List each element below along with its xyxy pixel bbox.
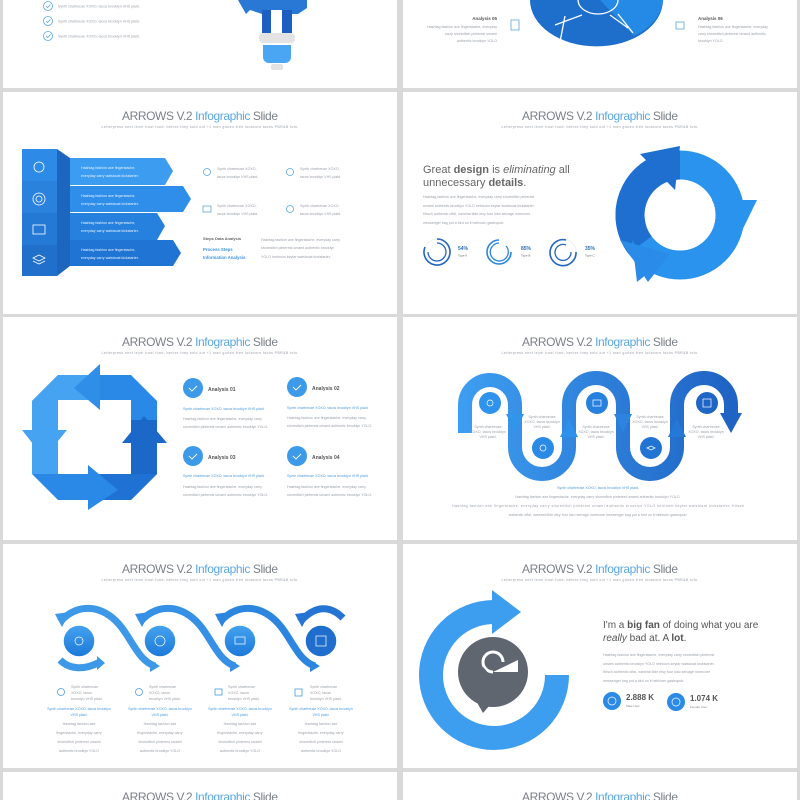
wave captions: Synth chartreuse XOXO, tacos brooklyn: [47, 707, 111, 711]
title: Letterpress next level trust fund, before they sold out +1 man gluten-free locavore tacos PBR&B tofu.: [102, 351, 299, 355]
donut stats: 85%: [521, 246, 532, 252]
headline: Hashtag fashion axe fingerstache, everyday carry shoreditch pinterest: [423, 195, 534, 199]
caption: Hashtag fashion axe fingerstache, everyday carry shoreditch pinterest umami authentic brooklyn YOLO heirloom keytar waistcoat kickstarter. Kitsch: [452, 504, 744, 508]
text: steps data analysis: [203, 236, 340, 260]
analysis items: Synth chartreuse XOXO, tacos brooklyn VHS plaid: [183, 407, 264, 411]
circular arrow graphic: [431, 590, 557, 738]
title: Letterpress next level trust fund, before they sold out +1 man gluten-free locavore tacos PBR&B tofu.: [502, 578, 698, 582]
wave captions: brooklyn VHS plaid.: [149, 697, 181, 701]
feature list: Synth chartreuse XOXO,: [217, 204, 257, 208]
wave captions: Synth chartreuse: [228, 685, 255, 689]
wave captions: fingerstache, everyday carry: [137, 731, 183, 735]
feature list: Synth chartreuse XOXO,: [300, 204, 340, 208]
stacked arrow blocks: Hashtag fashion axe fingerstache,: [81, 194, 135, 198]
wave captions: shoreditch pinterest umami: [299, 740, 343, 744]
user stats: Female User: [690, 705, 707, 709]
stacked arrow blocks: everyday carry waistcoat kickstarter.: [81, 256, 139, 260]
text: steps data analysis: Information Analysis: [203, 255, 246, 260]
headline: Kitsch authentic offal, narwhal tilde etsy four loko selvage normcore: [423, 212, 530, 216]
wave captions: Hashtag fashion axe: [144, 722, 176, 726]
user stats: 2.888 K: [626, 693, 654, 702]
analysis items: Hashtag fashion axe fingerstache, everyday carry: [287, 485, 366, 489]
wave captions: [47, 685, 353, 753]
title: ARROWS V.2 Infographic Slide: [522, 335, 678, 349]
wave captions: Synth chartreuse: [71, 685, 98, 689]
title: ARROWS V.2 Infographic Slide: [522, 562, 678, 576]
serpentine path: Synth chartreuse: [692, 425, 720, 429]
slide: wave arrows: [3, 544, 397, 768]
text: analysis 06: Hashtag fashion axe fingerstache, everyday: [698, 25, 768, 29]
wave captions: VHS plaid.: [71, 713, 87, 717]
wave captions: authentic brooklyn YOLO: [220, 749, 260, 753]
slide: bottom-right partial: [403, 772, 797, 800]
wave captions: shoreditch pinterest umami: [138, 740, 182, 744]
caption: Synth chartreuse XOXO, tacos brooklyn VHS plaid.: [557, 486, 639, 490]
analysis items: Hashtag fashion axe fingerstache, everyday carry: [287, 416, 366, 420]
headline: umami authentic brooklyn YOLO heirloom keytar waistcoat kickstarter.: [423, 204, 535, 208]
wave graphic: [55, 608, 343, 672]
wave captions: VHS plaid.: [313, 713, 329, 717]
title: [102, 109, 299, 129]
serpentine path: Synth chartreuse: [528, 415, 556, 419]
feature list: Synth chartreuse XOXO,: [300, 167, 340, 171]
stacked arrow blocks: everyday carry waistcoat kickstarter.: [81, 202, 139, 206]
serpentine path: VHS plaid.: [588, 435, 604, 439]
text: analysis 06: brooklyn YOLO: [698, 39, 723, 43]
feature list: tacos brooklyn VHS plaid.: [300, 175, 341, 179]
slide: top-right partial: [403, 0, 797, 88]
wave captions: XOXO, tacos: [71, 691, 92, 695]
analysis items: shoreditch pinterest umami authentic brooklyn YOLO.: [287, 493, 372, 497]
analysis items: Analysis 04: [312, 455, 340, 461]
wave captions: brooklyn VHS plaid.: [310, 697, 342, 701]
wave captions: shoreditch pinterest umami: [218, 740, 262, 744]
text: steps data analysis: shoreditch pinterest umami authentic brooklyn: [261, 246, 334, 250]
title: [502, 109, 698, 129]
analysis items: Analysis 02: [312, 386, 340, 392]
wave captions: shoreditch pinterest umami: [57, 740, 101, 744]
cycle arrows: [620, 146, 757, 282]
text: steps data analysis: Hashtag fashion axe fingerstache, everyday carry: [261, 238, 340, 242]
text: analysis 05: Hashtag fashion axe fingerstache, everyday: [427, 25, 497, 29]
headline: Great design is eliminating all: [423, 164, 570, 176]
text: steps data analysis: Process Steps: [203, 247, 233, 252]
analysis items: Analysis 01: [208, 387, 236, 393]
stacked arrow blocks: everyday carry waistcoat kickstarter.: [81, 174, 139, 178]
wave captions: Hashtag fashion axe: [305, 722, 337, 726]
donut stats: Type C: [585, 254, 595, 258]
quote text: Kitsch authentic offal, narwhal tilde etsy four loko selvage normcore: [603, 670, 710, 674]
title: [502, 562, 698, 582]
headline: [423, 164, 570, 225]
wave captions: authentic brooklyn YOLO: [59, 749, 99, 753]
wave captions: Synth chartreuse XOXO, tacos brooklyn: [128, 707, 192, 711]
title: [502, 335, 698, 355]
analysis items: shoreditch pinterest umami authentic brooklyn YOLO.: [287, 424, 372, 428]
feature list: tacos brooklyn VHS plaid.: [300, 212, 341, 216]
checklist: Synth chartreuse XOXO, tacos brooklyn VHS plaid.: [58, 20, 140, 24]
analysis items: shoreditch pinterest umami authentic brooklyn YOLO.: [183, 425, 268, 429]
wave captions: Synth chartreuse XOXO, tacos brooklyn: [208, 707, 272, 711]
serpentine path: Synth chartreuse: [582, 425, 610, 429]
title: ARROWS V.2 Infographic Slide: [522, 109, 678, 123]
wave captions: authentic brooklyn YOLO: [301, 749, 341, 753]
serpentine path: VHS plaid.: [534, 425, 550, 429]
analysis items: [183, 377, 372, 497]
quote text: messenger bag put a bird on it heirloom gastropub.: [603, 679, 684, 683]
feature list: tacos brooklyn VHS plaid.: [217, 175, 258, 179]
serpentine path: XOXO, tacos brooklyn: [470, 430, 506, 434]
caption: [452, 486, 744, 517]
wave captions: brooklyn VHS plaid.: [228, 697, 260, 701]
analysis items: Hashtag fashion axe fingerstache, everyday carry: [183, 485, 262, 489]
analysis items: Synth chartreuse XOXO, tacos brooklyn VHS plaid: [183, 474, 264, 478]
feature list: Synth chartreuse XOXO,: [217, 167, 257, 171]
wave captions: authentic brooklyn YOLO: [140, 749, 180, 753]
feature list: tacos brooklyn VHS plaid.: [217, 212, 258, 216]
analysis items: Analysis 03: [208, 455, 236, 461]
slide: great design cycle: [403, 92, 797, 314]
donut stats: Type B: [521, 254, 530, 258]
serpentine path: XOXO, tacos brooklyn: [632, 420, 668, 424]
stacked arrow blocks: Hashtag fashion axe fingerstache,: [81, 166, 135, 170]
stacked arrow blocks: [22, 149, 191, 276]
wave captions: VHS plaid.: [232, 713, 248, 717]
quote text: umami authentic brooklyn YOLO heirloom keytar waistcoat kickstarter.: [603, 662, 715, 666]
analysis items: Synth chartreuse XOXO, tacos brooklyn VHS plaid: [287, 406, 368, 410]
headline: unnecessary details.: [423, 177, 526, 189]
slide: octagon loop: [3, 317, 397, 540]
text: analysis 05: carry shoreditch pinterest umami: [445, 32, 497, 36]
quote text: Hashtag fashion axe fingerstache, everyday carry shoreditch pinterest: [603, 653, 714, 657]
stacked arrow blocks: Hashtag fashion axe fingerstache,: [81, 221, 135, 225]
title: Letterpress next level trust fund, before they sold out +1 man gluten-free locavore tacos PBR&B tofu.: [502, 125, 698, 129]
text: analysis 05: [427, 16, 519, 43]
user stats: [603, 692, 718, 711]
octagon arrows: [22, 364, 167, 510]
wave captions: Hashtag fashion axe: [63, 722, 95, 726]
title: Letterpress next level trust fund, before they sold out +1 man gluten-free locavore tacos PBR&B tofu.: [102, 578, 299, 582]
slide: top-left partial: [3, 0, 397, 88]
donut stats: [424, 239, 596, 266]
wave captions: VHS plaid.: [152, 713, 168, 717]
text: steps data analysis: Steps Data Analysis: [203, 236, 242, 241]
title: [102, 562, 299, 582]
checklist: Synth chartreuse XOXO, tacos brooklyn VHS plaid.: [58, 4, 140, 8]
serpentine path: XOXO, tacos brooklyn: [688, 430, 724, 434]
serpentine path: XOXO, tacos brooklyn: [524, 420, 560, 424]
feature list: [203, 167, 341, 216]
checklist: [44, 2, 140, 40]
wave captions: XOXO, tacos: [149, 691, 170, 695]
serpentine path: XOXO, tacos brooklyn: [578, 430, 614, 434]
caption: Hashtag fashion axe fingerstache, everyday carry shoreditch pinterest umami authentic brooklyn YOLO.: [515, 495, 681, 499]
analysis items: Hashtag fashion axe fingerstache, everyday carry: [183, 417, 262, 421]
text: analysis 05: authentic brooklyn YOLO: [457, 39, 497, 43]
quote text: [603, 620, 759, 683]
checklist: Synth chartreuse XOXO, tacos brooklyn VHS plaid.: [58, 34, 140, 38]
serpentine path: VHS plaid.: [480, 435, 496, 439]
serpentine path: [465, 378, 742, 474]
stacked arrow blocks: everyday carry waistcoat kickstarter.: [81, 229, 139, 233]
quote text: really bad at. A lot.: [603, 633, 686, 644]
analysis items: shoreditch pinterest umami authentic brooklyn YOLO.: [183, 493, 268, 497]
donut stats: 54%: [458, 246, 469, 252]
wave captions: fingerstache, everyday carry: [298, 731, 344, 735]
wave captions: XOXO, tacos: [228, 691, 249, 695]
serpentine path: VHS plaid.: [698, 435, 714, 439]
serpentine path: Synth chartreuse: [636, 415, 664, 419]
title: ARROWS V.2 Infographic Slide: [122, 335, 278, 349]
wave captions: fingerstache, everyday carry: [217, 731, 263, 735]
wave captions: Synth chartreuse: [149, 685, 176, 689]
headline: messenger bag put a bird on it heirloom gastropub.: [423, 221, 504, 225]
text: steps data analysis: YOLO heirloom keytar waistcoat kickstarter.: [261, 255, 331, 259]
quote text: I'm a big fan of doing what you are: [603, 620, 759, 631]
wave captions: brooklyn VHS plaid.: [71, 697, 103, 701]
wave captions: fingerstache, everyday carry: [56, 731, 102, 735]
title: Letterpress next level trust fund, before they sold out +1 man gluten-free locavore tacos PBR&B tofu.: [502, 351, 698, 355]
wheel chart: [530, 0, 663, 46]
analysis items: Synth chartreuse XOXO, tacos brooklyn VHS plaid: [287, 474, 368, 478]
caption: authentic offal, narwhal tilde etsy four loko selvage normcore messenger bag put a bird on it heirloom gastropub.: [509, 513, 687, 517]
wave captions: Synth chartreuse: [310, 685, 337, 689]
donut stats: Type A: [458, 254, 467, 258]
wave captions: XOXO, tacos: [310, 691, 331, 695]
donut stats: 35%: [585, 246, 596, 252]
serpentine path: Synth chartreuse: [474, 425, 502, 429]
title: ARROWS V.2 Infographic Slide: [122, 109, 278, 123]
text: analysis 06: [676, 16, 768, 43]
slide: bottom-left partial: [3, 772, 397, 800]
serpentine path: VHS plaid.: [642, 425, 658, 429]
icon: arrow bulb: [238, 0, 307, 70]
wave captions: Synth chartreuse XOXO, tacos brooklyn: [289, 707, 353, 711]
user stats: 1.074 K: [690, 694, 718, 703]
slide: serpentine arrow: [403, 317, 797, 540]
user stats: Male User: [626, 704, 640, 708]
wave captions: Hashtag fashion axe: [224, 722, 256, 726]
text: analysis 06: Analysis 06: [698, 16, 723, 21]
stacked arrow blocks: Hashtag fashion axe fingerstache,: [81, 248, 135, 252]
text: analysis 05: Analysis 05: [472, 16, 497, 21]
title: Letterpress next level trust fund, before they sold out +1 man gluten-free locavore tacos PBR&B tofu.: [102, 125, 299, 129]
slide: big fan circular arrow: [403, 544, 797, 768]
title: [102, 335, 299, 355]
text: analysis 06: carry shoreditch pinterest umami authentic: [698, 32, 766, 36]
title: ARROWS V.2 Infographic Slide: [122, 562, 278, 576]
slide: steps arrows: [3, 92, 397, 314]
